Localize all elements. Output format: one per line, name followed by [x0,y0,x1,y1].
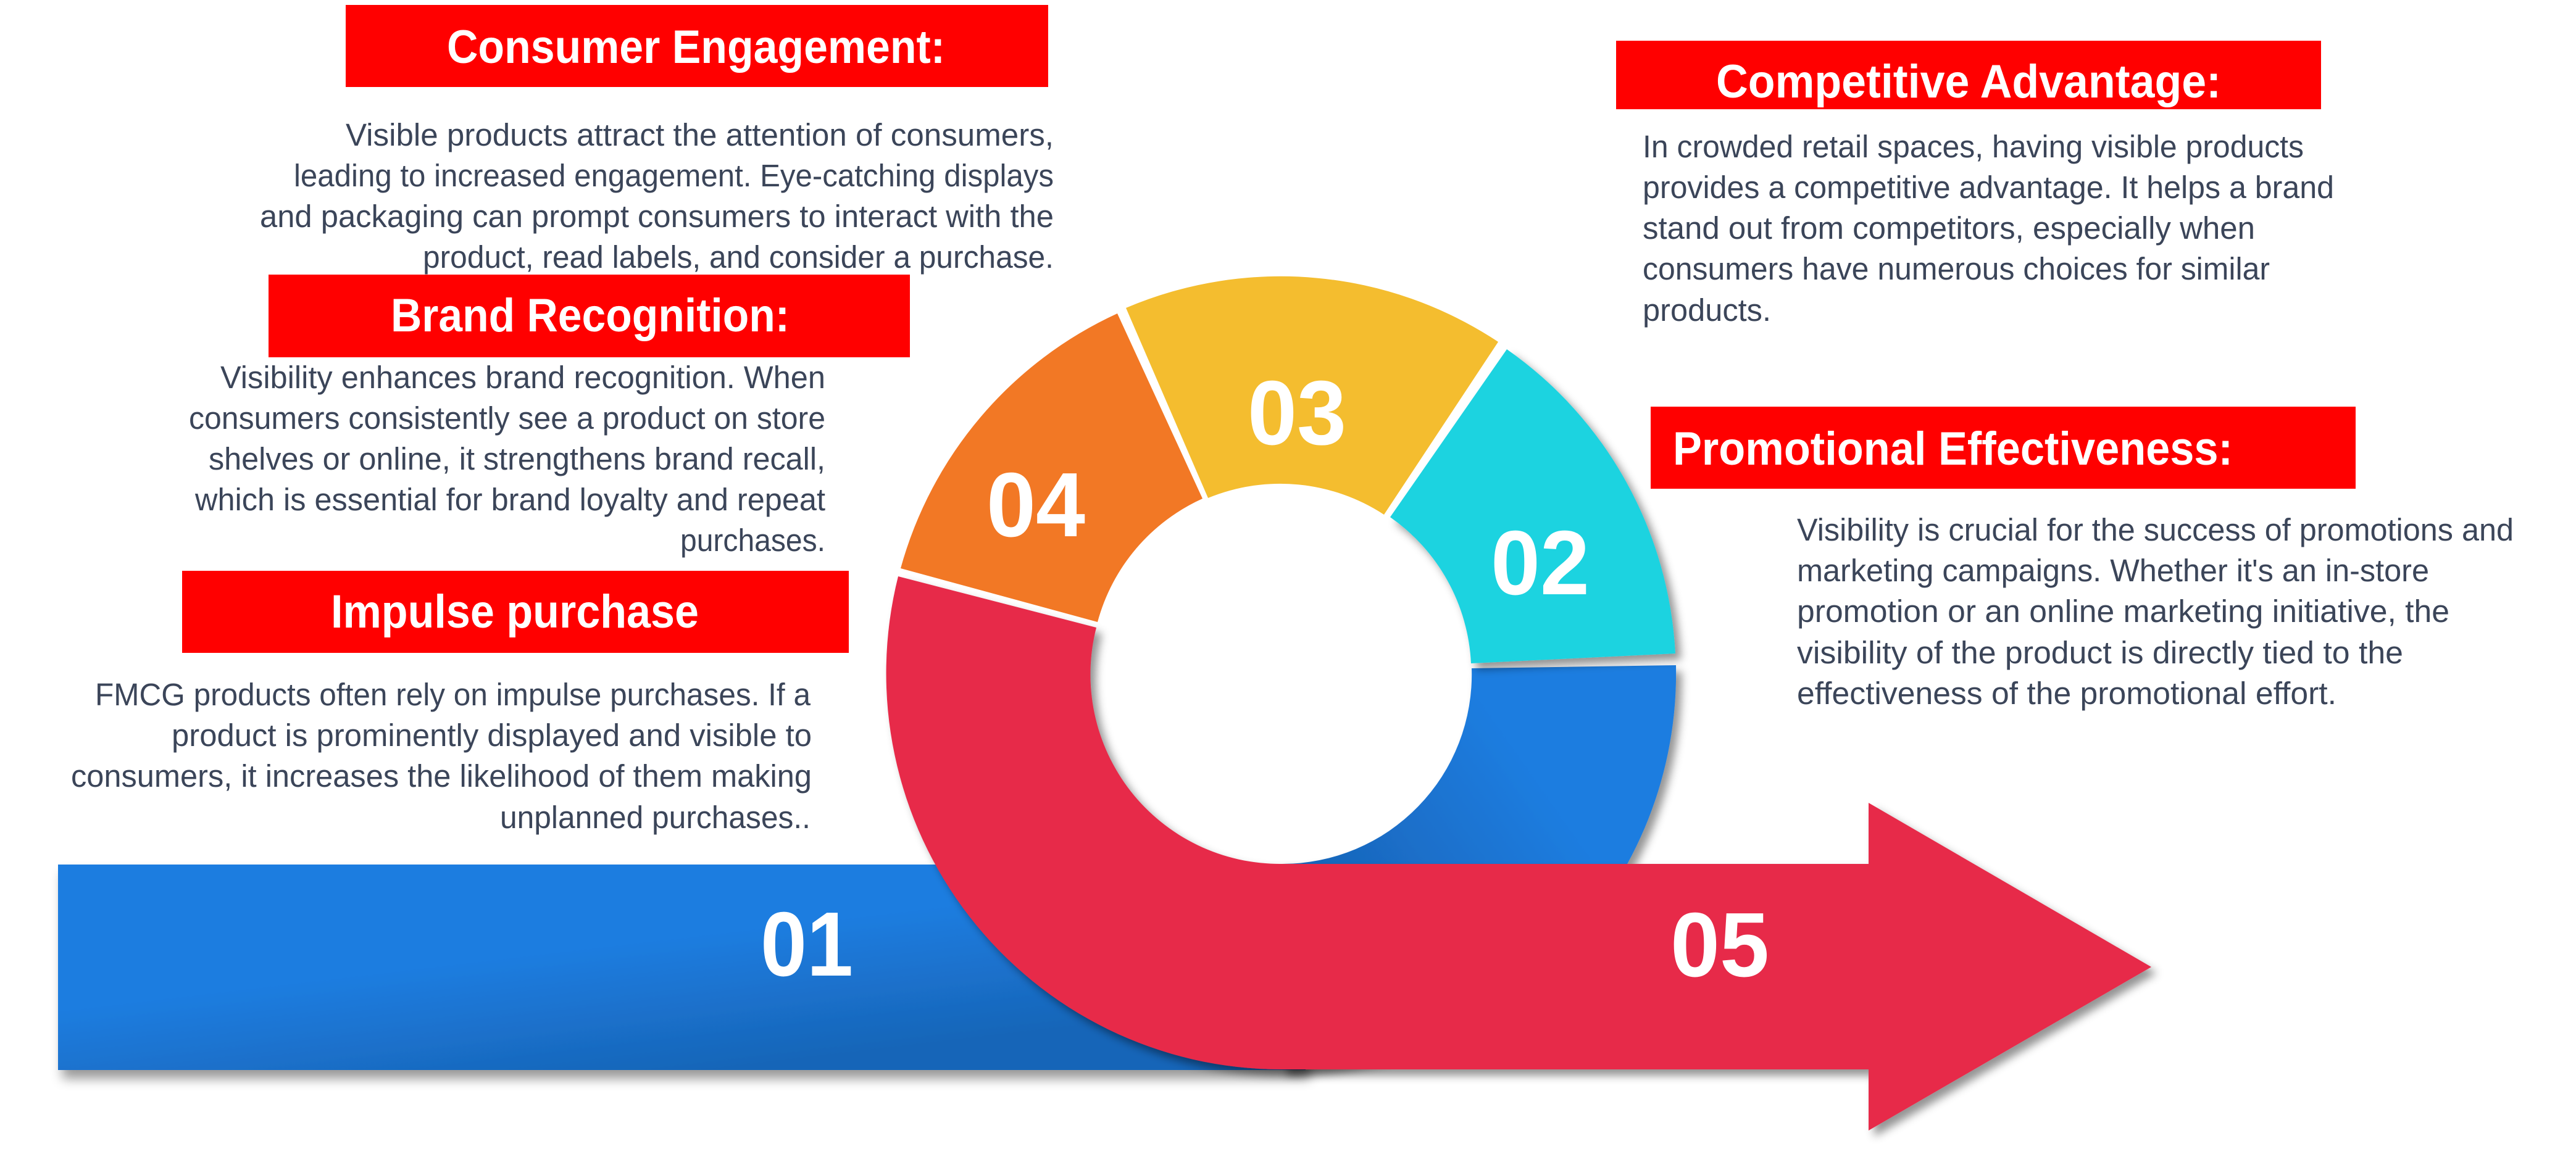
heading bar: impulse purchase: Impulse purchase [331,586,699,638]
number 05: 05 [1670,894,1769,996]
heading bar: promotional effectiveness: Promotional Effectiveness: [1673,423,2233,475]
text block: competitive advantage [1643,129,2334,328]
donut segment: cyan 02 [1390,349,1675,663]
text block: consumer engagement: Visible products attract the attention of consumers, [346,117,1054,152]
donut segment: yellow 03 [1126,276,1498,515]
text block: competitive advantage: In crowded retail spaces, having visible products [1643,129,2304,164]
text block: impulse purchase: product is prominently displayed and visible to [172,718,812,753]
text block: brand recognition: Visibility enhances brand recognition. When [220,360,825,395]
text block: competitive advantage: products. [1643,292,1771,328]
panel: impulse purchase [71,571,849,835]
heading bar: consumer engagement [346,5,1048,87]
text block: promotional effectiveness: marketing campaigns. Whether it's an in-store [1797,553,2429,588]
red curved arrow 05 [886,576,2151,1130]
number 04: 04 [986,454,1085,556]
text block: competitive advantage: consumers have numerous choices for similar [1643,251,2270,286]
heading bar: consumer engagement: Consumer Engagement: [447,21,945,73]
text block: impulse purchase [71,677,812,835]
text block: consumer engagement: and packaging can prompt consumers to interact with the [260,199,1054,234]
text block: consumer engagement [260,117,1054,275]
text block: brand recognition [189,360,825,558]
text block: promotional effectiveness: visibility of the product is directly tied to the [1797,635,2403,670]
text block: brand recognition: consumers consistently see a product on store [189,400,825,436]
text block: promotional effectiveness: promotion or an online marketing initiative, the [1797,594,2449,629]
text block: impulse purchase: unplanned purchases.. [500,800,811,835]
heading bar: promotional effectiveness [1651,407,2356,489]
text block: competitive advantage: stand out from competitors, especially when [1643,210,2255,246]
heading bar: impulse purchase [182,571,849,653]
text block: impulse purchase: consumers, it increases the likelihood of them making [71,758,812,794]
text block: impulse purchase: FMCG products often rely on impulse purchases. If a [95,677,811,712]
panel: brand recognition [189,275,910,558]
donut segment: orange 04 [901,313,1203,622]
panel: competitive advantage [1616,41,2334,328]
text block: promotional effectiveness: Visibility is crucial for the success of promotions and [1797,512,2514,547]
heading bar: competitive advantage: Competitive Advantage: [1716,56,2221,108]
text block: brand recognition: purchases. [680,523,825,558]
text block: brand recognition: which is essential for brand loyalty and repeat [194,482,825,517]
number 02: 02 [1491,512,1590,614]
number 01: 01 [761,894,853,995]
heading bar: brand recognition [269,275,910,357]
number 03: 03 [1248,362,1346,464]
text block: competitive advantage: provides a competitive advantage. It helps a brand [1643,170,2334,205]
text block: consumer engagement: product, read labels, and consider a purchase. [423,239,1054,275]
text block: promotional effectiveness: effectiveness of the promotional effort. [1797,676,2336,711]
text block: brand recognition: shelves or online, it strengthens brand recall, [209,441,825,476]
blue bar 01 [58,865,1306,1070]
text block: consumer engagement: leading to increased engagement. Eye-catching displays [294,158,1054,193]
donut segment: blue [1282,665,1676,1069]
heading bar: brand recognition: Brand Recognition: [391,289,790,342]
panel: promotional effectiveness [1651,407,2514,711]
text block: promotional effectiveness [1797,512,2514,711]
panel: consumer engagement [260,5,1054,275]
heading bar: competitive advantage [1616,41,2321,109]
